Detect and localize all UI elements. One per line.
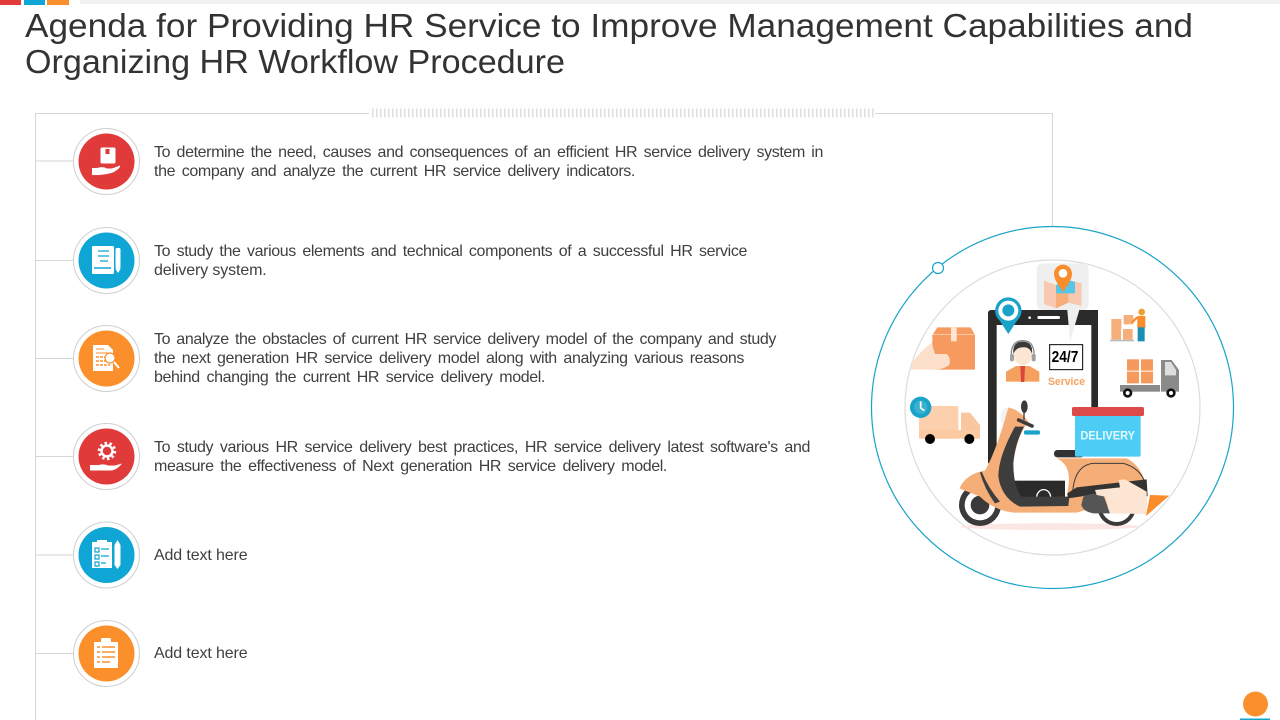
phone [988, 310, 1098, 497]
icon row 5: checklist and pencil [74, 522, 140, 588]
worker with boxes [1110, 309, 1145, 341]
text block 3: the next generation HR service delivery model along with analyzing various reasons [154, 350, 744, 367]
icon row 2: book and pen [74, 228, 140, 294]
text block 2: To study the various elements and technical components of a successful HR service [154, 243, 747, 260]
scooter [959, 400, 1169, 530]
decorative page marker [1240, 692, 1270, 720]
title: Agenda for Providing HR Service to Improve Management Capabilities and [25, 7, 1193, 44]
title [25, 7, 1193, 80]
text block 2: delivery system. [154, 262, 267, 279]
icon row 3: report with magnifier [74, 326, 140, 392]
icon row 1: hand holding box [74, 128, 140, 194]
delivery box: DELIVERY [1080, 429, 1135, 443]
illustration: delivery scooter and services [872, 226, 1234, 588]
blue pin [995, 297, 1022, 334]
text block 5: Add text here [154, 547, 247, 564]
text block 4: To study various HR service delivery best practices, HR service delivery latest software's and [154, 439, 810, 456]
delivery box [1072, 407, 1144, 457]
box in hand [910, 327, 975, 370]
text block 3: behind changing the current HR service delivery model. [154, 369, 545, 386]
grey truck [1120, 359, 1179, 398]
text block 6: Add text here [154, 645, 247, 662]
peach truck with clock [910, 397, 980, 444]
top accent bars [0, 0, 1280, 5]
text block 1: To determine the need, causes and consequences of an efficient HR service delivery system in [154, 144, 823, 161]
icon row 4: hand with gear [74, 424, 140, 490]
map bubble [1037, 263, 1089, 342]
text block 1: the company and analyze the current HR service delivery indicators. [154, 163, 635, 180]
24/7 badge: 24/7 [1052, 349, 1078, 366]
text block 3 [154, 331, 776, 386]
text block 4: measure the effectiveness of Next generation HR service delivery model. [154, 458, 667, 475]
service label: Service [1048, 376, 1085, 388]
24/7 badge [1050, 345, 1083, 370]
text block 1 [154, 144, 823, 180]
text block 3: To analyze the obstacles of current HR service delivery model of the company and study [154, 331, 776, 348]
title: Organizing HR Workflow Procedure [25, 43, 565, 80]
text block 4 [154, 439, 810, 475]
text block 2 [154, 243, 747, 279]
icon row 6: clipboard [74, 620, 140, 686]
agent [1006, 341, 1039, 382]
